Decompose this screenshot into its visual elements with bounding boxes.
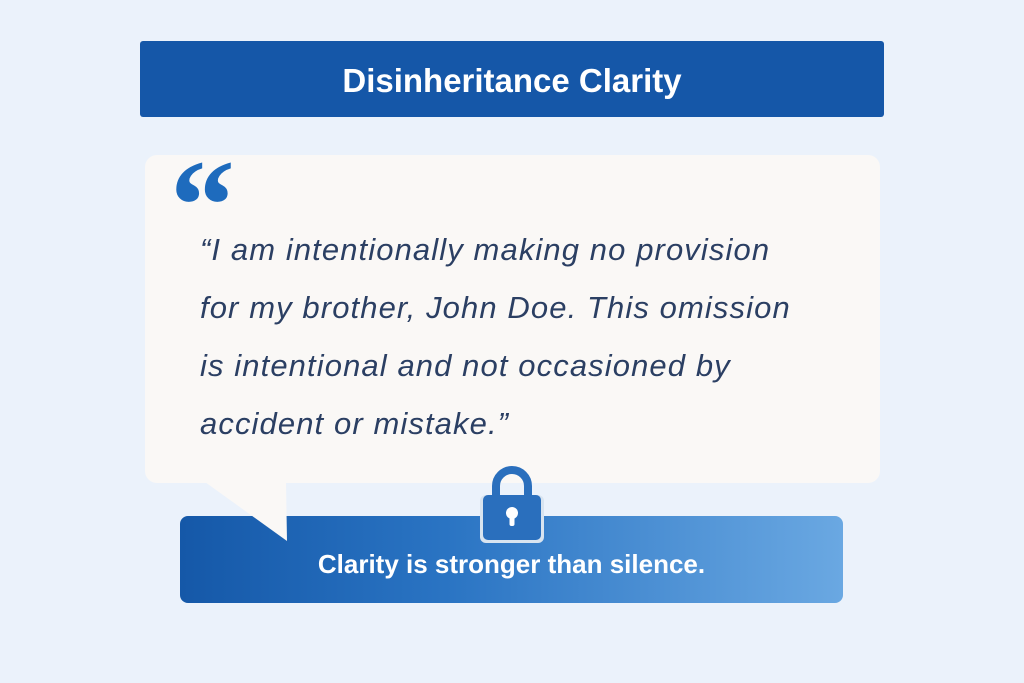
speech bubble panel <box>145 155 880 483</box>
quote text <box>200 232 791 441</box>
quote text: is intentional and not occasioned by <box>200 348 731 383</box>
bottom banner: Clarity is stronger than silence. <box>318 549 705 579</box>
title bar: Disinheritance Clarity <box>342 62 682 99</box>
bottom banner <box>180 516 843 603</box>
quote text: “I am intentionally making no provision <box>200 232 770 267</box>
quote text: accident or mistake.” <box>200 406 509 441</box>
icon: lock <box>480 466 544 543</box>
title bar <box>140 41 884 117</box>
quote text: for my brother, John Doe. This omission <box>200 290 791 325</box>
icon: quote mark: “ <box>170 134 229 278</box>
